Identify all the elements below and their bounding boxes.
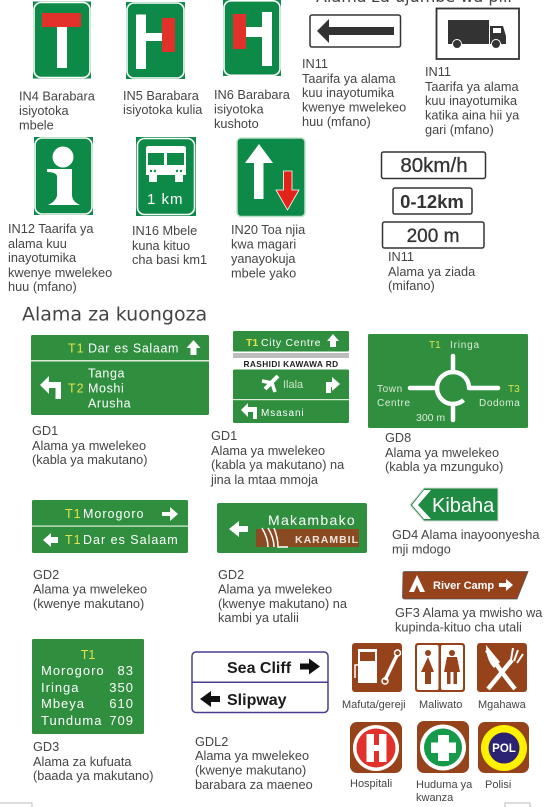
sign: GD2 with tourist camp: Makambako (268, 512, 356, 528)
sign: GD1 with street name: Msasani (261, 408, 305, 419)
caption: IN4: isiyotoka (19, 103, 70, 118)
sign: GD1 with street name: RASHIDI KAWAWA RD (244, 359, 338, 369)
caption: GD2 second: (kwenye makutano) na (218, 596, 348, 611)
caption: GDL2: GDL2 (195, 734, 228, 749)
caption: IN6: IN6 Barabara (214, 87, 290, 102)
sign: 0-12km plate: 0-12km (400, 191, 464, 212)
icon: restaurant (477, 643, 527, 692)
caption: IN12: alama kuu (8, 236, 67, 251)
sign: 0-12km plate (393, 188, 472, 214)
sign: GD2 with tourist camp: KARAMBIL (295, 534, 359, 546)
sign: GD3 distances: Morogoro (41, 663, 105, 678)
caption: GD4: GD4 Alama inayoonyesha (392, 527, 539, 542)
sign: GD2 two directions (32, 500, 188, 553)
caption: GD1 first: Alama ya mwelekeo (32, 438, 146, 453)
sign: 80km/h plate: 80km/h (400, 154, 468, 177)
caption: IN11 additional: Alama ya ziada (388, 264, 476, 279)
sign: GDL2 local roads: Sea Cliff (227, 660, 292, 677)
caption: GD2 second: Alama ya mwelekeo (218, 582, 332, 596)
icon: hospital (350, 722, 402, 773)
caption: IN20: yanayokuja (231, 251, 296, 266)
caption: IN12: kwenye mwelekeo (8, 265, 112, 280)
sign: IN12 (34, 137, 93, 215)
sign: GDL2 local roads: Slipway (227, 692, 287, 709)
sign: GD3 distances: 709 (109, 713, 134, 728)
sign: IN4 (33, 2, 91, 78)
sign: GDL2 local roads (192, 652, 328, 712)
caption: IN11 arrow: Taarifa ya alama (302, 71, 396, 86)
caption: GD2 second: kambi ya utalii (218, 610, 299, 625)
caption: GD2 first: (kwenye makutano) (33, 596, 144, 611)
caption: IN12: inayotumika (8, 250, 77, 265)
caption: GDL2: (kwenye makutano) (195, 762, 306, 778)
caption: Mafuta/gereji: Mafuta/gereji (342, 699, 406, 711)
sign: GD3 distances: 610 (109, 696, 134, 711)
caption: Hospitali: Hospitali (350, 778, 392, 790)
sign: GD2 with tourist camp (217, 503, 367, 553)
sign: GD1 three destinations (31, 335, 209, 415)
sign: IN16 bus (136, 137, 196, 216)
sign: GD1 three destinations: Arusha (88, 396, 131, 410)
caption: GD3: Alama za kufuata (33, 754, 132, 769)
caption: IN11 arrow: huu (mfano) (302, 114, 371, 129)
caption: GD1 second: GD1 (211, 428, 237, 443)
sign: GD1 with street name: City Centre (261, 337, 321, 349)
sign: GD3 distances: T1 (81, 648, 95, 662)
sign: GF3 River Camp: River Camp (433, 580, 494, 592)
sign: GD3 distances: Mbeya (41, 696, 85, 711)
sign: GD4 Kibaha: Kibaha (432, 495, 495, 517)
sign: GD3 distances: Iringa (41, 680, 80, 695)
sign: 200 m plate (382, 222, 484, 248)
sign: GD1 three destinations: Tanga (88, 366, 125, 380)
icon: police (478, 722, 529, 773)
sign: IN6 (223, 0, 281, 76)
caption: GD1 first: (kabla ya makutano) (32, 452, 148, 467)
sign: IN5 (126, 2, 185, 79)
sign: GD1 with street name: T1 (246, 337, 258, 349)
sign: IN20 (237, 138, 305, 216)
caption: IN11 truck: IN11 (425, 64, 451, 79)
heading: Alama za kuongoza: Alama za kuongoza (22, 304, 207, 326)
sign: GD4 Kibaha (410, 488, 498, 521)
sign: IN11 arrow plate (310, 15, 400, 47)
sign: GD3 distances: 350 (109, 680, 134, 695)
sign: GD8 roundabout: 300 m (416, 412, 445, 424)
icon: toilets (415, 643, 465, 692)
sign: GD2 two directions: Morogoro (83, 507, 144, 521)
caption: GDL2: Alama ya mwelekeo (195, 748, 309, 763)
caption: GF3: GF3 Alama ya mwisho wa (395, 605, 542, 620)
caption: GD4: mji mdogo (392, 542, 451, 556)
caption: GD1 second: jina la mtaa mmoja (210, 472, 319, 487)
sign: GD1 with street name (233, 331, 349, 423)
caption: IN11 arrow: kwenye mwelekeo (302, 100, 406, 114)
caption: IN11 truck: kuu inayotumika (425, 93, 518, 108)
sign: GD2 two directions: Dar es Salaam (83, 533, 179, 547)
sign: GD1 three destinations: T2 (68, 382, 85, 396)
caption: IN11 additional: IN11 (388, 249, 414, 264)
sign: GD8 roundabout: Town (377, 384, 403, 395)
caption: IN11 truck: Taarifa ya alama (425, 79, 519, 94)
caption: Polisi: Polisi (485, 779, 511, 791)
caption: IN4: IN4 Barabara (19, 88, 95, 104)
icon: first aid (417, 721, 469, 773)
icon: police: POL (492, 743, 516, 755)
sign: GD1 with street name: Ilala (283, 379, 304, 391)
caption: GD8: Alama ya mwelekeo (385, 445, 499, 460)
sign: 80km/h plate (382, 152, 486, 178)
caption: GD1 second: (kabla ya makutano) na (211, 457, 345, 472)
sign: GD3 distances: Tunduma (41, 713, 102, 728)
caption: IN11 arrow: IN11 (302, 56, 328, 71)
caption: IN11 truck: gari (mfano) (425, 122, 494, 137)
caption: GF3: kupinda-kituo cha utali (395, 620, 522, 634)
caption: IN20: kwa magari (231, 236, 296, 252)
caption: IN4: mbele (19, 118, 54, 132)
sign: GD1 three destinations: Dar es Salaam (88, 342, 179, 356)
caption: GD3: (baada ya makutano) (33, 768, 154, 783)
caption: Huduma ya kwanza: kwanza (416, 792, 454, 804)
caption: GD2 first: Alama ya mwelekeo (33, 582, 147, 596)
sign: IN16 bus: 1 km (147, 191, 184, 208)
caption: GDL2: barabara za maeneo (195, 777, 313, 792)
caption: IN5: isiyotoka kulia (123, 102, 203, 117)
caption: GD1 second: Alama ya mwelekeo (211, 443, 325, 458)
sign: GD2 two directions: T1 (65, 507, 82, 521)
sign: GD8 roundabout: Iringa (450, 340, 480, 351)
caption: IN11 arrow: kuu inayotumika (302, 85, 395, 100)
caption: IN16: IN16 Mbele (132, 223, 197, 238)
sign: GD8 roundabout (368, 334, 528, 428)
caption: GD8: GD8 (385, 430, 411, 445)
caption: GD1 first: GD1 (32, 423, 58, 438)
sign: GD8 roundabout: Dodoma (479, 398, 520, 409)
caption: GD2 first: GD2 (33, 567, 59, 582)
sign: GD8 roundabout: T1 (429, 340, 441, 351)
sign: GD3 distances (32, 639, 144, 734)
caption: IN11 additional: (mifano) (388, 278, 435, 293)
sign: GD1 three destinations: Moshi (88, 382, 124, 396)
caption: IN6: isiyotoka (214, 102, 265, 116)
caption: IN5: IN5 Barabara (123, 88, 199, 103)
sign: GD1 three destinations: T1 (68, 342, 85, 356)
caption: GD8: (kabla ya mzunguko) (385, 459, 503, 474)
sign: GD8 roundabout: Centre (377, 398, 411, 409)
caption: GD3: GD3 (33, 739, 59, 754)
sign: IN11 truck plate (436, 8, 519, 59)
sign: GF3 River Camp (402, 572, 528, 599)
caption: IN16: cha basi km1 (132, 252, 207, 267)
caption: Maliwato: Maliwato (419, 699, 462, 711)
caption: IN16: kuna kituo (132, 238, 190, 253)
sign: 200 m plate: 200 m (407, 226, 459, 247)
caption: Huduma ya kwanza: Huduma ya (416, 779, 472, 791)
caption: IN6: kushoto (214, 116, 259, 131)
caption: IN12: IN12 Taarifa ya (8, 221, 94, 236)
caption: GD2 second: GD2 (218, 567, 244, 582)
caption: IN12: huu (mfano) (8, 279, 77, 294)
caption: Mgahawa: Mgahawa (478, 699, 527, 711)
sign: GD3 distances: 83 (118, 663, 134, 678)
caption: IN20: IN20 Toa njia (231, 222, 305, 237)
caption: IN20: mbele yako (231, 266, 296, 280)
sign: GD2 two directions: T1 (65, 533, 82, 547)
caption: IN11 truck: katika aina hii ya (425, 108, 520, 122)
sign: GD8 roundabout: T3 (508, 384, 520, 395)
icon: fuel and garage (352, 643, 402, 692)
